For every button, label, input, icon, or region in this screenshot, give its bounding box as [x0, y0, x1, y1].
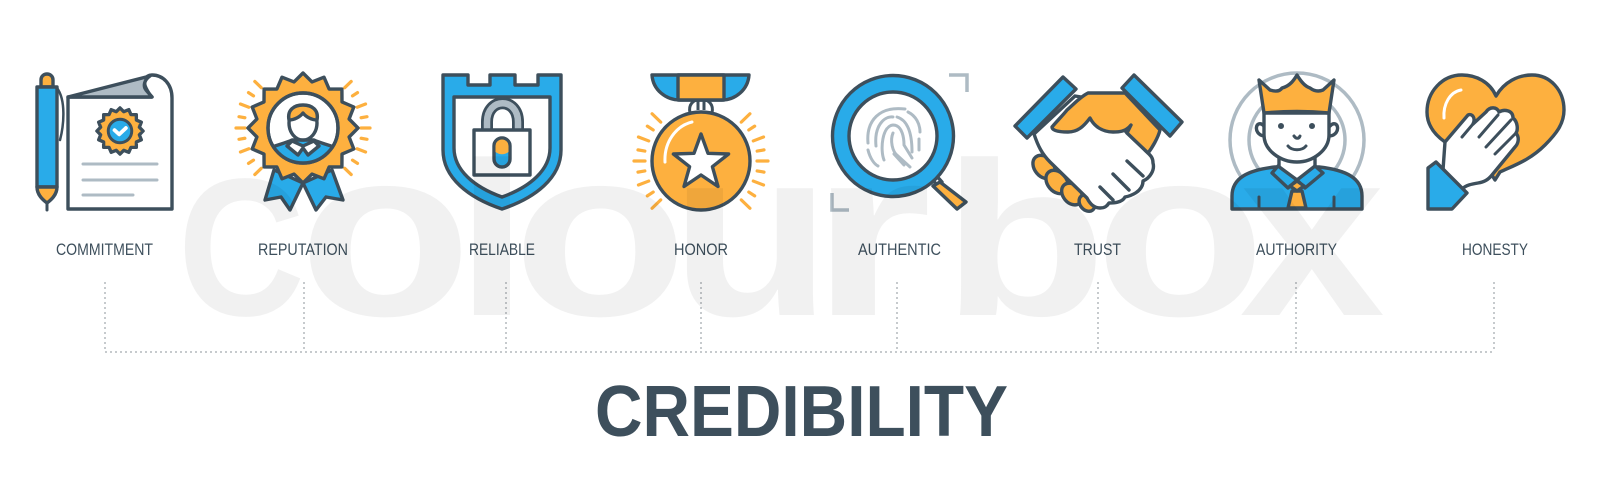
- icon: man with crown: [1230, 73, 1364, 209]
- icon: hand on heart: [1427, 75, 1564, 209]
- icon: magnifier with fingerprint: [832, 75, 967, 210]
- infographic canvas: [35, 71, 1566, 436]
- icon: handshake: [1015, 75, 1182, 214]
- label: honor: HONOR: [674, 241, 728, 259]
- fingerprint: [868, 109, 920, 167]
- dotted connector bracket: [105, 282, 1494, 352]
- watermark: b: [942, 118, 1107, 362]
- watermark: C: [178, 137, 305, 357]
- icon: pen and certified document: [37, 74, 172, 210]
- icon: star medal: [634, 75, 768, 210]
- watermark: r: [810, 98, 932, 366]
- icon: reputation rosette: [236, 73, 370, 210]
- watermark: o: [1095, 98, 1265, 367]
- icon: shield with padlock: [443, 75, 561, 209]
- title: CREDIBILITY: [595, 372, 1008, 452]
- watermark: l: [456, 118, 529, 362]
- watermark: x: [1239, 99, 1385, 367]
- label: reputation: REPUTATION: [258, 241, 348, 259]
- watermark: o: [512, 99, 688, 367]
- label: authentic: AUTHENTIC: [858, 241, 941, 259]
- watermark: [178, 97, 1385, 367]
- label: honesty: HONESTY: [1462, 241, 1528, 259]
- label: trust: TRUST: [1074, 241, 1121, 259]
- watermark: u: [671, 99, 831, 366]
- watermark: o: [299, 97, 472, 366]
- label: reliable: RELIABLE: [469, 241, 535, 259]
- label: commitment: COMMITMENT: [56, 241, 153, 259]
- label: authority: AUTHORITY: [1256, 241, 1337, 259]
